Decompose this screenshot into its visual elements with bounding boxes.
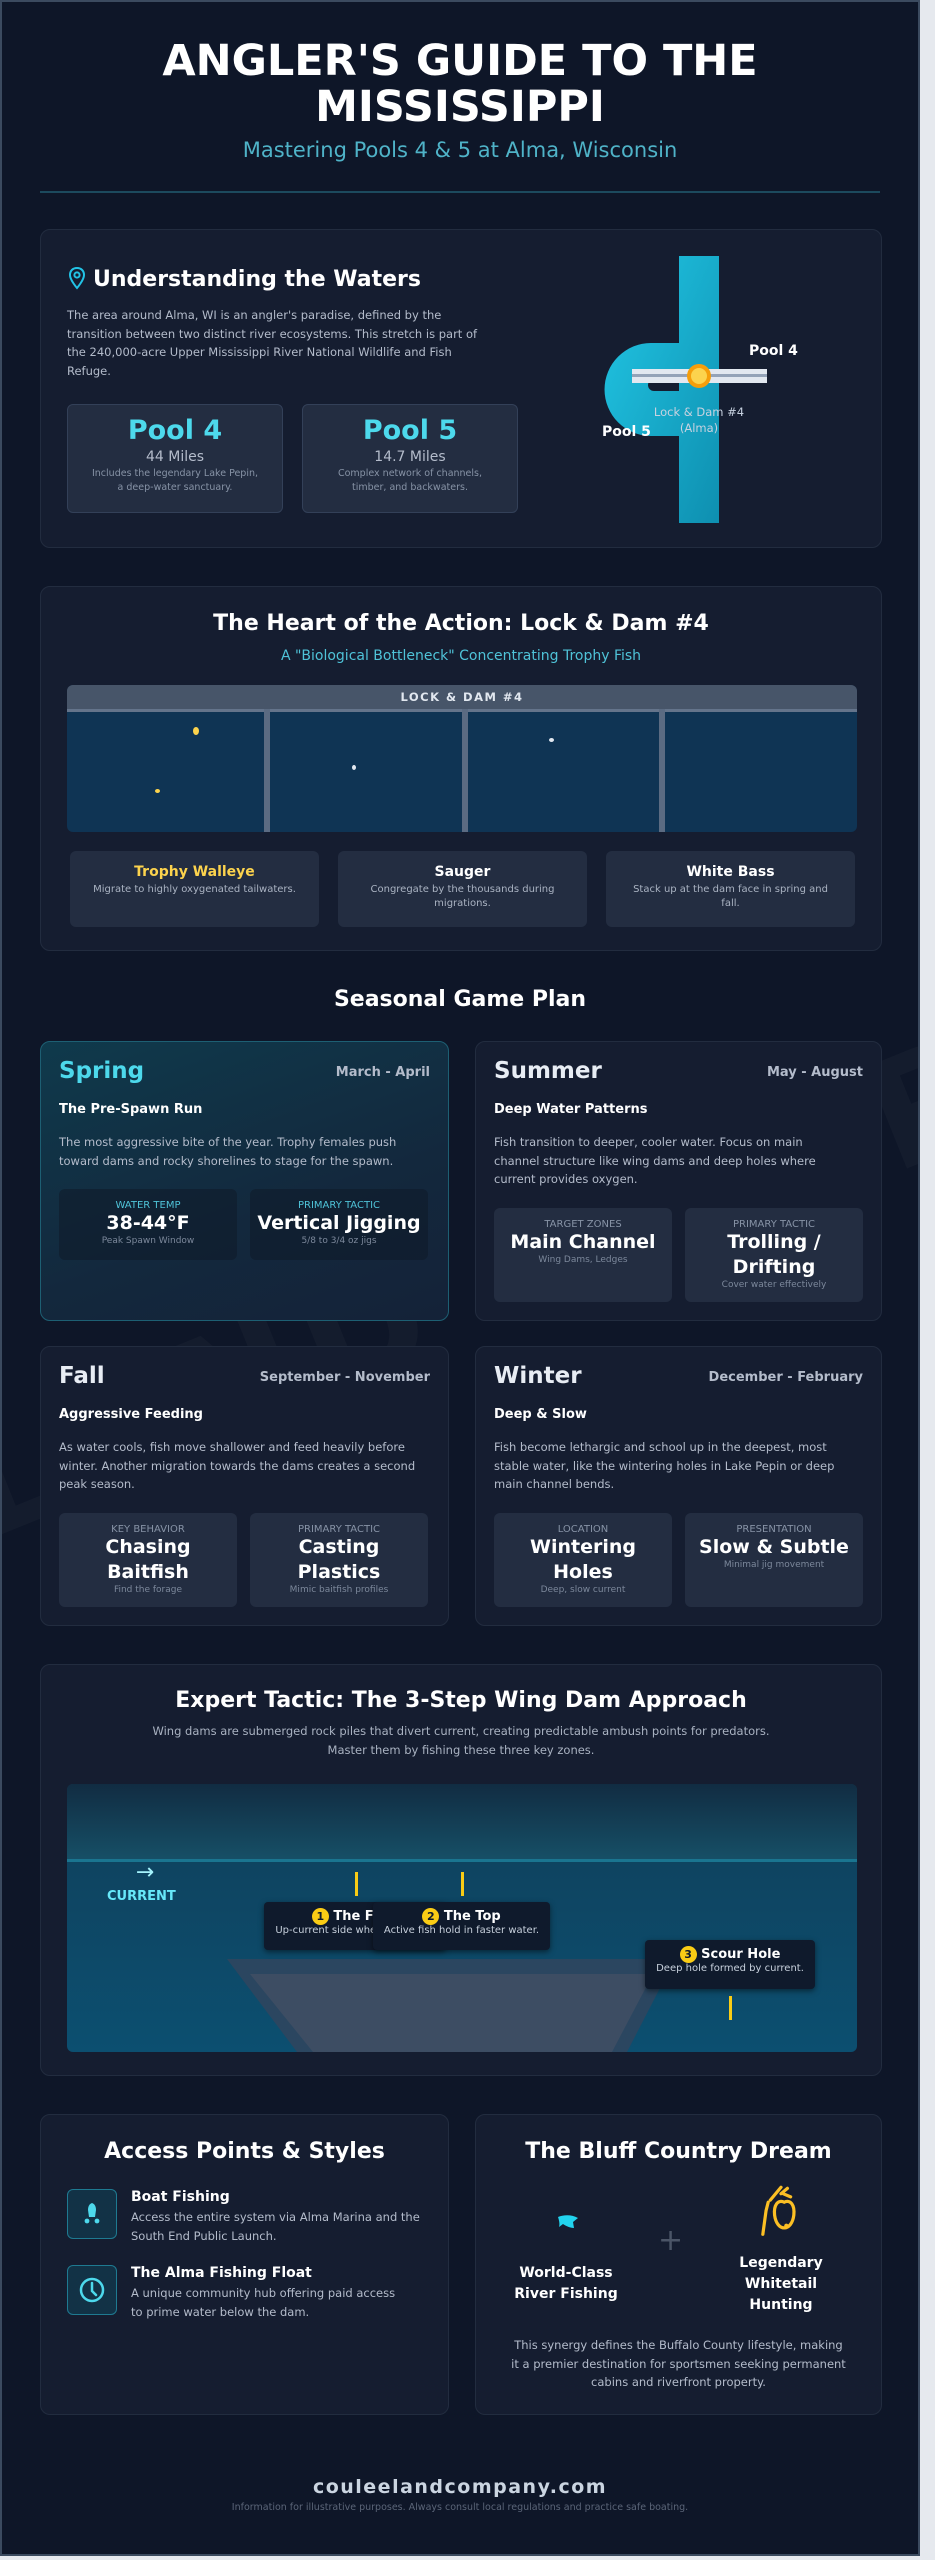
- panel: spring: Spring: [59, 1058, 144, 1084]
- callout 1: the face: The Face: [333, 1909, 398, 1924]
- map: river and lock & dam: Pool 5: [602, 424, 651, 440]
- panel: winter: [475, 1346, 882, 1626]
- panel: winter: stable water, like the wintering holes in Lake Pepin or deep: [494, 1458, 834, 1472]
- card: pool 4: Pool 4: [128, 415, 222, 446]
- panel: spring: The most aggressive bite of the year. Trophy females push toward dams and rocky shorelines to stage for the spawn.: [59, 1135, 396, 1168]
- stat: key behavior: Baitfish: [107, 1561, 189, 1583]
- card: pool 4: Includes the legendary Lake Pepin,: [92, 468, 258, 479]
- label: hunting: Legendary: [739, 2255, 823, 2271]
- callout 1: the face: Up-current side where fish wait.: [275, 1925, 435, 1936]
- callout 2: the top: The Top: [444, 1909, 501, 1924]
- label: hunting: Hunting: [749, 2297, 813, 2313]
- card: pool 5: Pool 5: [363, 415, 457, 446]
- panel: bluff country dream: [475, 2114, 882, 2415]
- stat: target zones: Main Channel: [510, 1231, 656, 1253]
- stat: key behavior: [59, 1513, 237, 1607]
- panel: summer: [475, 1041, 882, 1321]
- text: Information for illustrative purposes. Always consult local regulations and practice safe boating.: [232, 2502, 688, 2513]
- callout 2: the top: [373, 1902, 550, 1950]
- heading: seasonal game plan: Seasonal Game Plan: [334, 987, 586, 1012]
- card: pool 4: 44 Miles: [146, 449, 204, 465]
- card: sauger: Congregate by the thousands during migrations.: [370, 884, 554, 909]
- panel: fall: Fall: [59, 1363, 105, 1389]
- plus: +: [658, 2223, 683, 2258]
- stat: presentation: Minimal jig movement: [724, 1560, 824, 1570]
- card: pool 4: [67, 404, 283, 513]
- label: fishing: [514, 2265, 618, 2302]
- label: hunting: Whitetail: [745, 2276, 817, 2292]
- dam diagram: LOCK & DAM #4: [400, 690, 524, 704]
- callout 1: the face: [264, 1902, 446, 1950]
- subheading: A "Biological Bottleneck" Concentrating Trophy Fish: [281, 648, 641, 664]
- synergy text: This synergy defines the Buffalo County lifestyle, making: [514, 2338, 843, 2352]
- panel: winter: December - February: [709, 1370, 863, 1385]
- stat: primary tactic: [685, 1208, 863, 1302]
- callout 3: scour hole: [645, 1940, 815, 1989]
- panel: winter: main channel bends.: [494, 1477, 614, 1491]
- stat: primary tactic: 5/8 to 3/4 oz jigs: [301, 1236, 377, 1246]
- dam diagram: [67, 685, 857, 832]
- map: river and lock & dam: Lock & Dam #4: [654, 405, 744, 419]
- description: [152, 1724, 770, 1756]
- heading: Expert Tactic: The 3-Step Wing Dam Approach: [175, 1688, 747, 1713]
- card: trophy walleye: Trophy Walleye: [134, 864, 255, 880]
- stat: primary tactic: Mimic baitfish profiles: [290, 1585, 388, 1595]
- description: Wing dams are submerged rock piles that divert current, creating predictable ambush points for predators.: [152, 1724, 770, 1738]
- panel: access points: Boat Fishing: [131, 2189, 230, 2205]
- arrow: current: →: [136, 1860, 154, 1885]
- panel: access points: The Alma Fishing Float: [131, 2265, 312, 2281]
- synergy text: [511, 2338, 846, 2389]
- icon: location pin: [69, 267, 85, 290]
- card: pool 5: 14.7 Miles: [374, 449, 446, 465]
- stat: location: Deep, slow current: [541, 1585, 625, 1595]
- stat: presentation: PRESENTATION: [736, 1524, 812, 1535]
- callout 3: scour hole: Deep hole formed by current.: [656, 1963, 804, 1974]
- icon: deer: [761, 2186, 796, 2236]
- card: pool 5: [302, 404, 518, 513]
- panel: bluff country dream: The Bluff Country Dream: [525, 2139, 832, 2164]
- panel: fall: As water cools, fish move shallower and feed heavily before winter. Another migration towards the dams creates a second peak season.: [59, 1440, 415, 1491]
- stat: target zones: TARGET ZONES: [544, 1219, 622, 1230]
- callout 3: scour hole: 3: [684, 1948, 692, 1961]
- panel: summer: Summer: [494, 1058, 602, 1084]
- icon: clock: [67, 2265, 117, 2315]
- panel: wing dam approach: [40, 1664, 882, 2076]
- panel: spring: March - April: [336, 1065, 430, 1080]
- stat: primary tactic: [250, 1189, 428, 1260]
- description: Master them by fishing these three key zones.: [328, 1742, 594, 1756]
- stat: location: Holes: [553, 1561, 613, 1583]
- card: sauger: Sauger: [435, 864, 490, 880]
- stat: location: Wintering: [530, 1536, 636, 1558]
- heading: Understanding the Waters: [93, 267, 421, 292]
- label: fishing: River Fishing: [514, 2286, 618, 2302]
- card: sauger: [338, 851, 587, 927]
- icon: boat: [67, 2189, 117, 2239]
- card: pool 5: timber, and backwaters.: [352, 482, 468, 493]
- stat: presentation: [685, 1513, 863, 1607]
- stat: key behavior: KEY BEHAVIOR: [111, 1524, 185, 1535]
- panel: fall: [40, 1346, 449, 1626]
- stat: target zones: Wing Dams, Ledges: [538, 1255, 628, 1265]
- panel: summer: Deep Water Patterns: [494, 1102, 647, 1117]
- map: river and lock & dam: [602, 256, 798, 523]
- panel: lock & dam 4: [40, 586, 882, 951]
- stat: key behavior: Find the forage: [114, 1585, 182, 1595]
- panel: spring: [40, 1041, 449, 1321]
- stat: primary tactic: Drifting: [733, 1256, 815, 1278]
- panel: understanding the waters: [40, 229, 882, 548]
- panel: winter: Winter: [494, 1363, 582, 1389]
- title: MISSISSIPPI: [315, 82, 605, 132]
- card: trophy walleye: Migrate to highly oxygenated tailwaters.: [93, 884, 296, 895]
- stat: water temp: [59, 1189, 237, 1260]
- stat: key behavior: Chasing: [105, 1536, 191, 1558]
- stat: primary tactic: Plastics: [298, 1561, 380, 1583]
- card: white bass: White Bass: [686, 864, 775, 880]
- wing dam diagram: CURRENT: [107, 1889, 176, 1904]
- fish markers: [193, 727, 199, 735]
- panel: access points: Access Points & Styles: [104, 2139, 385, 2164]
- title: [162, 36, 758, 132]
- stat: primary tactic: PRIMARY TACTIC: [733, 1219, 815, 1230]
- callout 2: the top: 2: [427, 1910, 435, 1923]
- card: white bass: Stack up at the dam face in spring and fall.: [633, 884, 828, 909]
- card: pool 5: Complex network of channels,: [338, 468, 482, 479]
- icon: fish: [558, 2215, 578, 2228]
- panel: fall: Aggressive Feeding: [59, 1407, 203, 1422]
- panel: winter: Fish become lethargic and school up in the deepest, most: [494, 1440, 827, 1454]
- panel: access points: Access the entire system via Alma Marina and the South End Public Launch.: [131, 2210, 420, 2242]
- wing dam diagram: [67, 1784, 857, 2052]
- panel: summer: Fish transition to deeper, cooler water. Focus on main channel structure like wing dams and deep holes where current provides oxygen.: [494, 1135, 816, 1186]
- stat: location: [494, 1513, 672, 1607]
- stat: primary tactic: Casting: [299, 1536, 379, 1558]
- synergy text: cabins and riverfront property.: [591, 2375, 766, 2389]
- stat: location: LOCATION: [558, 1524, 608, 1535]
- intro text: The area around Alma, WI is an angler's paradise, defined by the transition between two distinct river ecosystems. This stretch is part of the 240,000-acre Upper Mississippi River National Wildlife and Fish Refuge.: [67, 308, 477, 378]
- dam shape: [227, 1959, 660, 2052]
- panel: access points: [40, 2114, 449, 2415]
- stat: primary tactic: PRIMARY TACTIC: [298, 1524, 380, 1535]
- panel: access points: A unique community hub offering paid access: [131, 2286, 395, 2300]
- stat: primary tactic: PRIMARY TACTIC: [298, 1200, 380, 1211]
- stat: water temp: Peak Spawn Window: [102, 1236, 194, 1246]
- label: fishing: World-Class: [519, 2265, 613, 2281]
- stat: water temp: 38-44°F: [106, 1212, 190, 1234]
- stat: primary tactic: Cover water effectively: [722, 1280, 826, 1290]
- subtitle: Mastering Pools 4 & 5 at Alma, Wisconsin: [243, 138, 677, 162]
- stat: target zones: [494, 1208, 672, 1302]
- label: hunting: [739, 2255, 823, 2313]
- title: ANGLER'S GUIDE TO THE: [162, 36, 758, 86]
- panel: fall: September - November: [260, 1370, 430, 1385]
- card: pool 4: a deep-water sanctuary.: [118, 482, 232, 493]
- panel: spring: The Pre-Spawn Run: [59, 1102, 202, 1117]
- stat: presentation: Slow & Subtle: [699, 1536, 849, 1558]
- callout 1: the face: 1: [316, 1910, 324, 1923]
- panel: summer: May - August: [767, 1065, 863, 1080]
- callout 3: scour hole: Scour Hole: [701, 1947, 780, 1962]
- synergy text: it a premier destination for sportsmen seeking permanent: [511, 2356, 846, 2370]
- heading: The Heart of the Action: Lock & Dam #4: [213, 611, 709, 636]
- panel: access points: to prime water below the dam.: [131, 2304, 309, 2318]
- stat: primary tactic: [250, 1513, 428, 1607]
- stat: water temp: WATER TEMP: [115, 1200, 181, 1211]
- panel: winter: Deep & Slow: [494, 1407, 587, 1422]
- footer: couleelandcompany.com: [313, 2476, 607, 2498]
- callout 2: the top: Active fish hold in faster water.: [384, 1925, 539, 1936]
- stat: primary tactic: Vertical Jigging: [257, 1212, 421, 1234]
- stat: primary tactic: Trolling /: [727, 1231, 821, 1253]
- card: white bass: [606, 851, 855, 927]
- map: river and lock & dam: (Alma): [680, 421, 718, 435]
- map: river and lock & dam: Pool 4: [749, 343, 798, 359]
- card: trophy walleye: [70, 851, 319, 927]
